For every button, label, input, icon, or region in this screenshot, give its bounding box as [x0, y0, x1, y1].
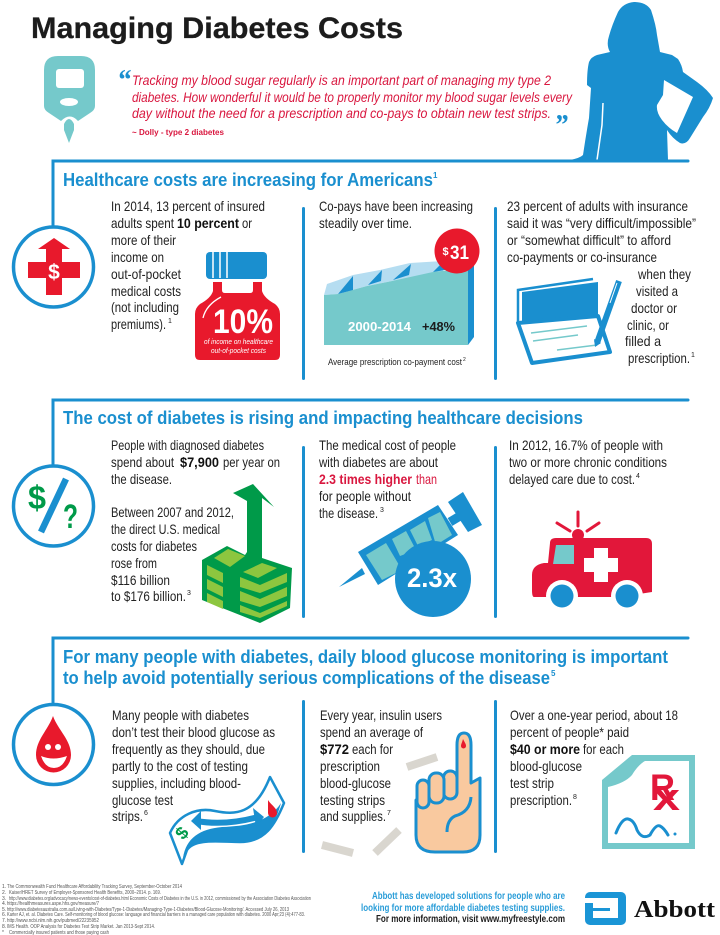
patient quote: ” — [554, 110, 568, 141]
footnotes: 7. — [2, 918, 6, 924]
text: out-of-pocket spending: adults spent — [111, 215, 174, 231]
footnotes: 2. — [2, 890, 6, 896]
icon: medical cross with arrow: $ — [48, 261, 60, 284]
text: medical cost — [318, 437, 456, 521]
text: difficulty affording co-pays: 23 percent of adults with insurance — [507, 198, 688, 214]
text: medical cost: than — [416, 471, 437, 487]
footnotes: Karter AJ, et. al. Diabetes Care. Self-monitoring of blood glucose: language and financial barriers in a managed care population with diabetes. 2000 Apr;23 (4):477-83. — [7, 912, 305, 918]
text: testing frequency — [112, 707, 275, 824]
icon: dollar slash question: $ — [28, 479, 46, 516]
text: difficulty affording co-pays: or “somewhat difficult” to afford — [507, 232, 671, 248]
text: diabetes spending: $116 billion — [111, 572, 170, 588]
text: difficulty affording co-pays: when they — [637, 266, 691, 282]
text: medical cost: The medical cost of people — [319, 437, 456, 453]
footnotes: https://healthmeasures.aspe.hhs.gov/measure/7 — [7, 901, 99, 907]
chart: co-pay increase: $ — [442, 246, 449, 258]
footnotes: 1. — [2, 884, 6, 890]
callout: Abbott solutions: looking for more affordable diabetes testing supplies. — [361, 903, 565, 914]
icon: syringe with 2.3x: 2.3x — [407, 563, 457, 593]
text: testing frequency: don’t test their blood glucose as — [112, 724, 275, 740]
text: testing frequency: 6 — [144, 810, 148, 817]
text: diabetes spending: costs for diabetes — [111, 538, 197, 554]
text: insulin users: each for — [352, 741, 393, 757]
text: out-of-pocket spending: 10 percent — [177, 215, 239, 231]
icon: pill bottle 10 percent — [195, 252, 280, 360]
icon: blood glucose meter — [44, 56, 95, 143]
text: insulin users: 7 — [387, 810, 391, 817]
text: insulin users: prescription — [320, 758, 380, 774]
heading: cost of diabetes: The cost of diabetes is rising and impacting healthcare decisions — [63, 407, 583, 428]
icon: prescription: R — [650, 767, 675, 808]
text: difficulty affording co-pays: doctor or — [631, 300, 677, 316]
icon: pill bottle 10 percent: out-of-pocket costs — [211, 346, 266, 355]
text: diabetes spending: $7,900 — [180, 454, 219, 470]
text: difficulty affording co-pays: 1 — [691, 352, 695, 359]
text: medical cost: 3 — [380, 507, 384, 514]
callout: Abbott solutions: Abbott has developed solutions for people who are — [372, 891, 565, 902]
heading: glucose monitoring — [63, 646, 668, 688]
text: difficulty affording co-pays: clinic, or — [627, 317, 669, 333]
icon: prescription: x — [653, 777, 680, 819]
icon: syringe with 2.3x — [339, 492, 482, 617]
icon: test strip ribbon — [170, 777, 284, 864]
footnotes: The Commonwealth Fund Healthcare Affordability Tracking Survey, September-October 2014 — [7, 884, 182, 890]
footnotes: Kaiser/HRET Survey of Employer-Sponsored Health Benefits, 2000–2014. p. 169. — [9, 890, 161, 896]
text: co-pays — [319, 198, 473, 231]
text: diabetes spending: rose from — [111, 555, 157, 571]
text: insulin users — [320, 707, 442, 824]
patient quote: ~ Dolly - type 2 diabetes — [132, 127, 224, 137]
text: insulin users: Every year, insulin users — [320, 707, 442, 723]
text: testing frequency: supplies, including blood- — [112, 775, 241, 791]
text: testing frequency: partly to the cost of testing — [112, 758, 248, 774]
icon: dollar slash question: ? — [63, 498, 78, 536]
icon: pill bottle 10 percent: 10% — [213, 303, 273, 341]
text: diabetes spending — [111, 437, 280, 604]
text: insulin users: testing strips — [320, 792, 385, 808]
text: insulin users: $772 — [320, 741, 349, 757]
icon: money stack with arrow — [202, 484, 292, 623]
text: delayed care: In 2012, 16.7% of people with — [509, 437, 663, 453]
text: testing frequency: glucose test — [112, 792, 173, 808]
text: out-of-pocket spending: income on — [111, 249, 164, 265]
chart: co-pay increase: 2000-2014 — [348, 319, 412, 334]
icon: smiling blood drop — [14, 704, 94, 784]
text: insulin users: blood-glucose — [320, 775, 391, 791]
text: medical cost: for people without — [319, 488, 411, 504]
text: diabetes spending: spend about — [111, 454, 174, 470]
text: delayed care: delayed care due to cost. — [509, 471, 635, 487]
text: testing frequency: strips. — [112, 808, 143, 824]
text: diabetes spending: 3 — [187, 590, 191, 597]
text: out-of-pocket spending: or — [242, 215, 252, 231]
text: out-of-pocket spending: (not including — [111, 299, 179, 315]
text: co-pays: Co-pays have been increasing — [319, 198, 473, 214]
footnotes: http://www.ncbi.nlm.nih.gov/pubmed/22235952 — [7, 918, 99, 924]
text: test strip cost: for each — [583, 741, 624, 757]
patient quote — [117, 65, 573, 141]
chart: co-pay increase: 2 — [463, 357, 466, 363]
text: testing frequency: frequently as they should, due — [112, 741, 265, 757]
text: diabetes spending: People with diagnosed diabetes — [111, 437, 264, 453]
patient quote: Tracking my blood sugar regularly is an important part of managing my type 2 — [132, 72, 551, 88]
logo: Abbott: Abbott — [634, 897, 715, 923]
text: out-of-pocket spending: out-of-pocket — [111, 266, 181, 282]
text: difficulty affording co-pays: co-payments or co-insurance — [507, 249, 657, 265]
footnotes: 6. — [2, 912, 6, 918]
heading: glucose monitoring: For many people with diabetes, daily blood glucose monitoring is important — [63, 646, 668, 667]
patient quote: “ — [117, 65, 131, 96]
text: test strip cost: test strip — [510, 775, 554, 791]
text: test strip cost: $40 or more — [510, 741, 580, 757]
footnotes: IMS Health. OOP Analysis for Diabetes Test Strip Market. Jan 2013-Sept 2014. — [7, 924, 155, 930]
footnotes: 3. — [2, 896, 6, 902]
chart: co-pay increase: +48% — [422, 319, 455, 334]
text: difficulty affording co-pays: visited a — [636, 283, 678, 299]
icon: test strips scattered — [322, 757, 437, 853]
text: medical cost: with diabetes are about — [318, 454, 438, 470]
text: test strip cost: percent of people* paid — [510, 724, 629, 740]
footnotes: http://www.diabetesaustralia.com.au/Living-with-Diabetes/Type-1-Diabetes/Managing-Type-1-Diabetes/Blood-Glucose-Monitoring/. Accessed July 26, 2013 — [7, 907, 289, 913]
callout: Abbott solutions: For more information, visit www.myfreestyle.com — [376, 914, 565, 925]
text: test strip cost — [510, 707, 678, 808]
icon: test strip ribbon: $ — [171, 823, 193, 843]
heading: glucose monitoring: 5 — [551, 669, 556, 678]
text: diabetes spending: Between 2007 and 2012, — [111, 504, 234, 520]
heading: healthcare costs: 1 — [433, 171, 438, 180]
text: diabetes spending: the disease. — [111, 471, 172, 487]
panel: healthcare costs — [14, 161, 696, 380]
callout: Abbott solutions — [361, 891, 565, 925]
patient quote: day without the need for a prescription and co-pays to obtain new test strips. — [132, 105, 551, 121]
text: out-of-pocket spending: premiums). — [111, 316, 166, 332]
icon: hand with pricked finger — [416, 733, 480, 852]
icon: checkbook and pen — [518, 279, 619, 363]
icon: dollar slash question — [14, 466, 94, 546]
footnotes — [2, 884, 311, 935]
patient quote: diabetes. How wonderful it would be to properly monitor my blood sugar levels every — [132, 89, 573, 105]
text: out-of-pocket spending: 1 — [168, 318, 172, 325]
text: testing frequency: Many people with diabetes — [112, 707, 249, 723]
heading: glucose monitoring: to help avoid potentially serious complications of the disease — [63, 667, 550, 688]
text: co-pays: steadily over time. — [319, 215, 412, 231]
footnotes: 5. — [2, 907, 6, 913]
text: insulin users: and supplies. — [320, 808, 386, 824]
text: delayed care — [509, 437, 667, 487]
text: test strip cost: prescription. — [510, 792, 572, 808]
text: difficulty affording co-pays: filled a — [625, 333, 661, 349]
text: out-of-pocket spending: In 2014, 13 percent of insured — [111, 198, 265, 214]
heading: healthcare costs: Healthcare costs are increasing for Americans — [63, 169, 433, 190]
text: medical cost: 2.3 times higher — [319, 471, 412, 487]
text: difficulty affording co-pays — [507, 198, 696, 366]
chart: co-pay increase: Average prescription co-payment cost — [328, 357, 462, 368]
chart: co-pay increase: 31 — [450, 243, 469, 264]
chart: co-pay increase — [324, 228, 480, 368]
text: test strip cost: blood-glucose — [510, 758, 582, 774]
text: diabetes spending: the direct U.S. medical — [111, 521, 220, 537]
text: out-of-pocket spending: medical costs — [111, 283, 181, 299]
text: delayed care: 4 — [636, 473, 640, 480]
text: test strip cost: 8 — [573, 794, 577, 801]
title: Managing Diabetes Costs — [31, 12, 403, 45]
text: difficulty affording co-pays: prescription. — [628, 350, 690, 366]
text: out-of-pocket spending — [111, 198, 265, 332]
panel: glucose monitoring — [14, 638, 695, 864]
icon: ambulance — [532, 512, 652, 612]
text: insulin users: spend an average of — [320, 724, 423, 740]
icon: pill bottle 10 percent: of income on healthcare — [204, 337, 273, 346]
logo: Abbott — [583, 892, 715, 925]
text: diabetes spending: per year on — [223, 454, 280, 470]
text: out-of-pocket spending: more of their — [111, 232, 176, 248]
footnotes: http://www.diabetes.org/advocacy/news-events/cost-of-diabetes.html Economic Costs of Diabetes in the U.S. in 2012, commissioned by the Association Diabetes Association — [9, 896, 311, 902]
text: diabetes spending: to $176 billion. — [111, 588, 186, 604]
silhouette of woman — [570, 2, 713, 160]
icon: prescription — [602, 755, 695, 849]
footnotes: 8. — [2, 924, 6, 930]
footnotes: 4. — [2, 901, 6, 907]
icon: medical cross with arrow — [14, 227, 94, 307]
panel: cost of diabetes — [14, 400, 688, 623]
text: medical cost: the disease. — [319, 505, 378, 521]
text: delayed care: two or more chronic conditions — [509, 454, 667, 470]
text: test strip cost: Over a one-year period, about 18 — [510, 707, 678, 723]
